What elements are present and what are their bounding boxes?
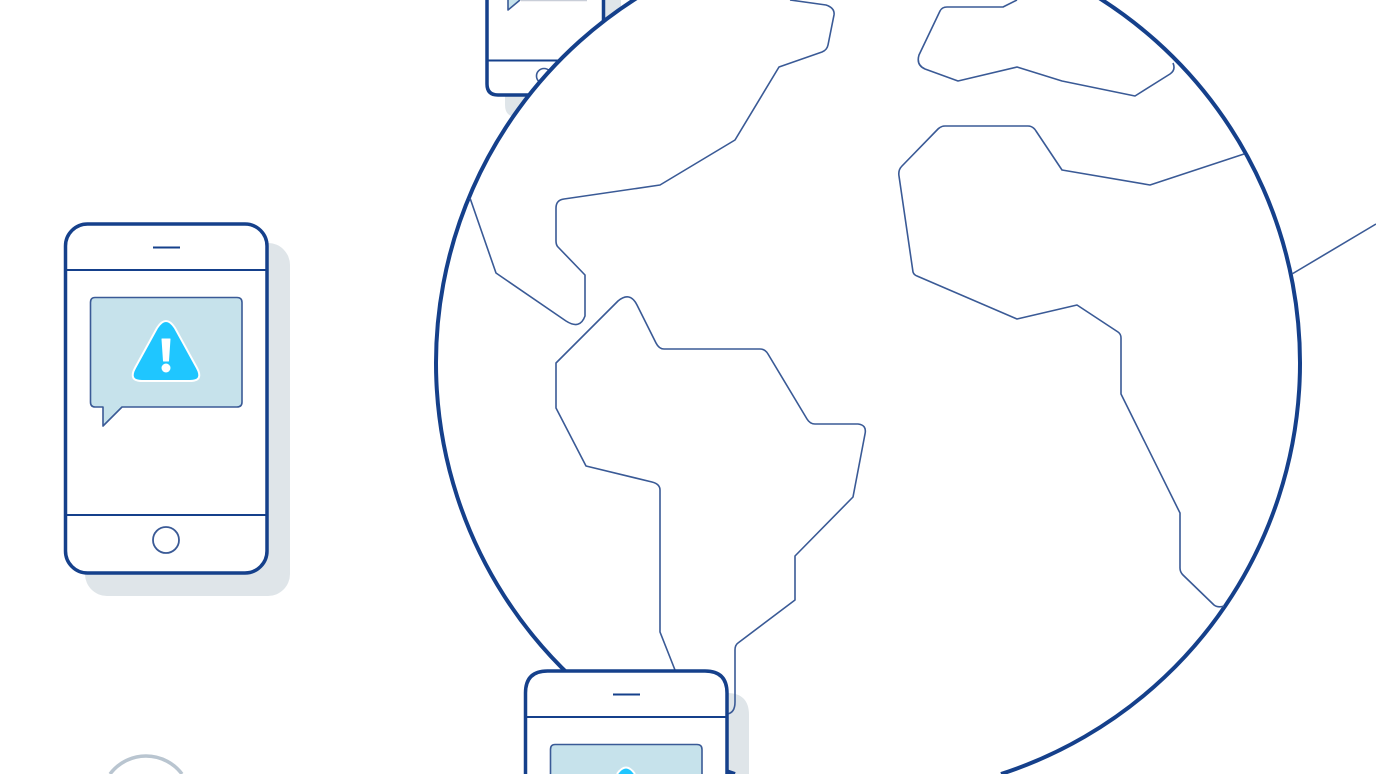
continents on globe [470,0,1376,714]
icon: top phone, partly behind globe [487,0,621,117]
bottom divider [66,514,266,516]
phone shadow [85,243,290,596]
globe outline [436,0,1300,774]
icon: globe disc [436,0,1300,774]
icon: left phone with alert [66,224,290,596]
icon: partial grey circle at bottom edge [110,756,182,774]
icon: warning triangle [133,321,199,381]
continent: greenland [918,0,1174,96]
home button [153,527,179,553]
top divider and speaker [526,694,726,717]
icon: warning triangle [617,768,635,774]
phone body [526,671,727,774]
icon: bottom phone with alert [526,671,727,774]
phone body [66,224,267,573]
continent: south america [556,297,865,714]
continent: north america [470,0,834,325]
speech bubble [90,298,242,426]
continent: far right edge [1292,224,1376,274]
top divider and speaker [66,248,266,270]
icon: bottom phone shadow [547,693,749,774]
speech bubble [550,744,702,774]
continent: eurasia and africa [899,126,1244,607]
